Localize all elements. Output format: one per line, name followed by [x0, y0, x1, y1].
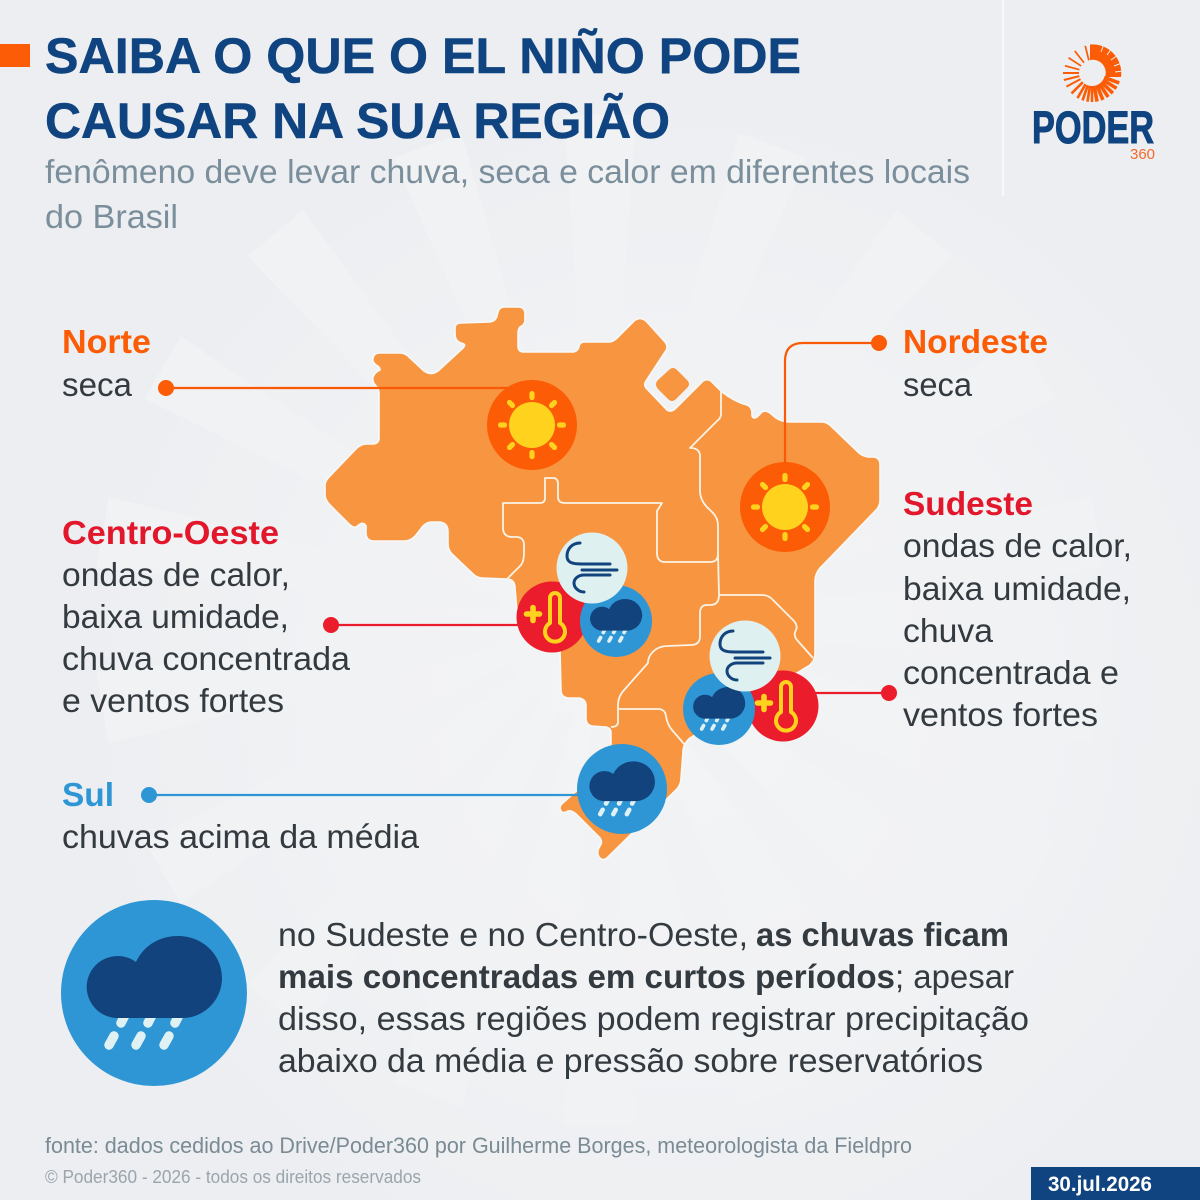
text Centro-Oeste: chuva concentrada — [62, 640, 351, 677]
text Sul: chuvas acima da média — [62, 818, 420, 855]
callout: Sul — [62, 776, 580, 855]
text Nordeste: seca — [903, 366, 973, 403]
Amapá detached shape — [656, 368, 689, 401]
text Sudeste — [903, 527, 1132, 733]
text block: explanation: no Sudeste e no Centro-Oeste, — [278, 916, 748, 953]
icon: wind — [556, 532, 628, 604]
icon: logo sun — [1063, 44, 1123, 102]
heading Sudeste: Sudeste — [903, 485, 1033, 522]
copyright: © Poder360 - 2026 - todos os direitos reservados — [45, 1167, 421, 1187]
callout: Sudeste — [810, 485, 1132, 733]
text block: explanation: abaixo da média e pressão sobre reservatórios — [278, 1042, 983, 1079]
icon: rain — [683, 673, 755, 745]
text Sudeste: chuva — [903, 612, 994, 649]
dot Sul — [141, 787, 157, 803]
dot Nordeste — [871, 335, 887, 351]
logo: Poder360 — [1032, 44, 1155, 163]
subtitle: do Brasil — [45, 198, 178, 235]
source: fonte: dados cedidos ao Drive/Poder360 por Guilherme Borges, meteorologista da Fieldpro — [45, 1133, 912, 1158]
date badge: 30.jul.2026 — [1048, 1173, 1152, 1196]
region borders — [503, 390, 813, 745]
callout: Norte — [62, 323, 510, 403]
logo 360: 360 — [1130, 146, 1155, 163]
text block: explanation: mais concentradas em curtos períodos — [278, 958, 895, 995]
text Sudeste: baixa umidade, — [903, 570, 1131, 607]
leader line Norte — [166, 387, 510, 389]
icon: large rain cloud — [61, 900, 247, 1086]
icon: rain — [580, 585, 652, 657]
Brazil regions outline — [325, 307, 880, 860]
callout: Nordeste — [785, 323, 1048, 465]
dot Norte — [158, 380, 174, 396]
date badge — [1031, 1167, 1200, 1200]
title: SAIBA O QUE O EL NIÑO PODE — [45, 28, 801, 84]
icon: sun Norte — [487, 380, 577, 470]
text Sudeste: ventos fortes — [903, 696, 1098, 733]
text Norte: seca — [62, 366, 133, 403]
heading Norte: Norte — [62, 323, 151, 360]
text Centro-Oeste: ondas de calor, — [62, 556, 290, 593]
text Sudeste: ondas de calor, — [903, 527, 1132, 564]
text block: explanation — [278, 916, 1029, 1079]
text Centro-Oeste: e ventos fortes — [62, 682, 284, 719]
icons: Centro-Oeste — [516, 532, 652, 657]
text block: explanation: as chuvas ficam — [756, 916, 1009, 953]
icon: wind — [710, 620, 780, 692]
icon: rain Sul — [577, 744, 667, 834]
heading Centro-Oeste: Centro-Oeste — [62, 514, 279, 551]
dot Centro-Oeste — [323, 617, 339, 633]
map of Brazil — [325, 307, 880, 860]
leader line Centro-Oeste — [331, 624, 525, 626]
text block: explanation: ; apesar — [895, 958, 1014, 995]
title — [45, 28, 801, 149]
text block: explanation: disso, essas regiões podem registrar precipitação — [278, 1000, 1029, 1037]
logo wordmark: PODER — [1032, 102, 1154, 153]
orange title marker — [0, 44, 30, 67]
icon: thermometer — [516, 582, 588, 652]
subtitle: fenômeno deve levar chuva, seca e calor em diferentes locais — [45, 153, 970, 190]
text Sudeste: concentrada e — [903, 654, 1119, 691]
leader line Sudeste — [810, 692, 889, 694]
text Centro-Oeste: baixa umidade, — [62, 598, 289, 635]
callout: Centro-Oeste — [62, 514, 525, 719]
icon: sun Nordeste — [740, 462, 830, 552]
leader line Sul — [149, 794, 580, 796]
leader line Nordeste — [785, 343, 879, 465]
title: CAUSAR NA SUA REGIÃO — [45, 93, 670, 149]
icons: Sudeste — [683, 620, 818, 745]
dot Sudeste — [881, 685, 897, 701]
heading Sul: Sul — [62, 776, 114, 813]
text Centro-Oeste — [62, 556, 351, 719]
subtitle — [45, 153, 970, 235]
heading Nordeste: Nordeste — [903, 323, 1048, 360]
icon: thermometer — [748, 670, 818, 742]
